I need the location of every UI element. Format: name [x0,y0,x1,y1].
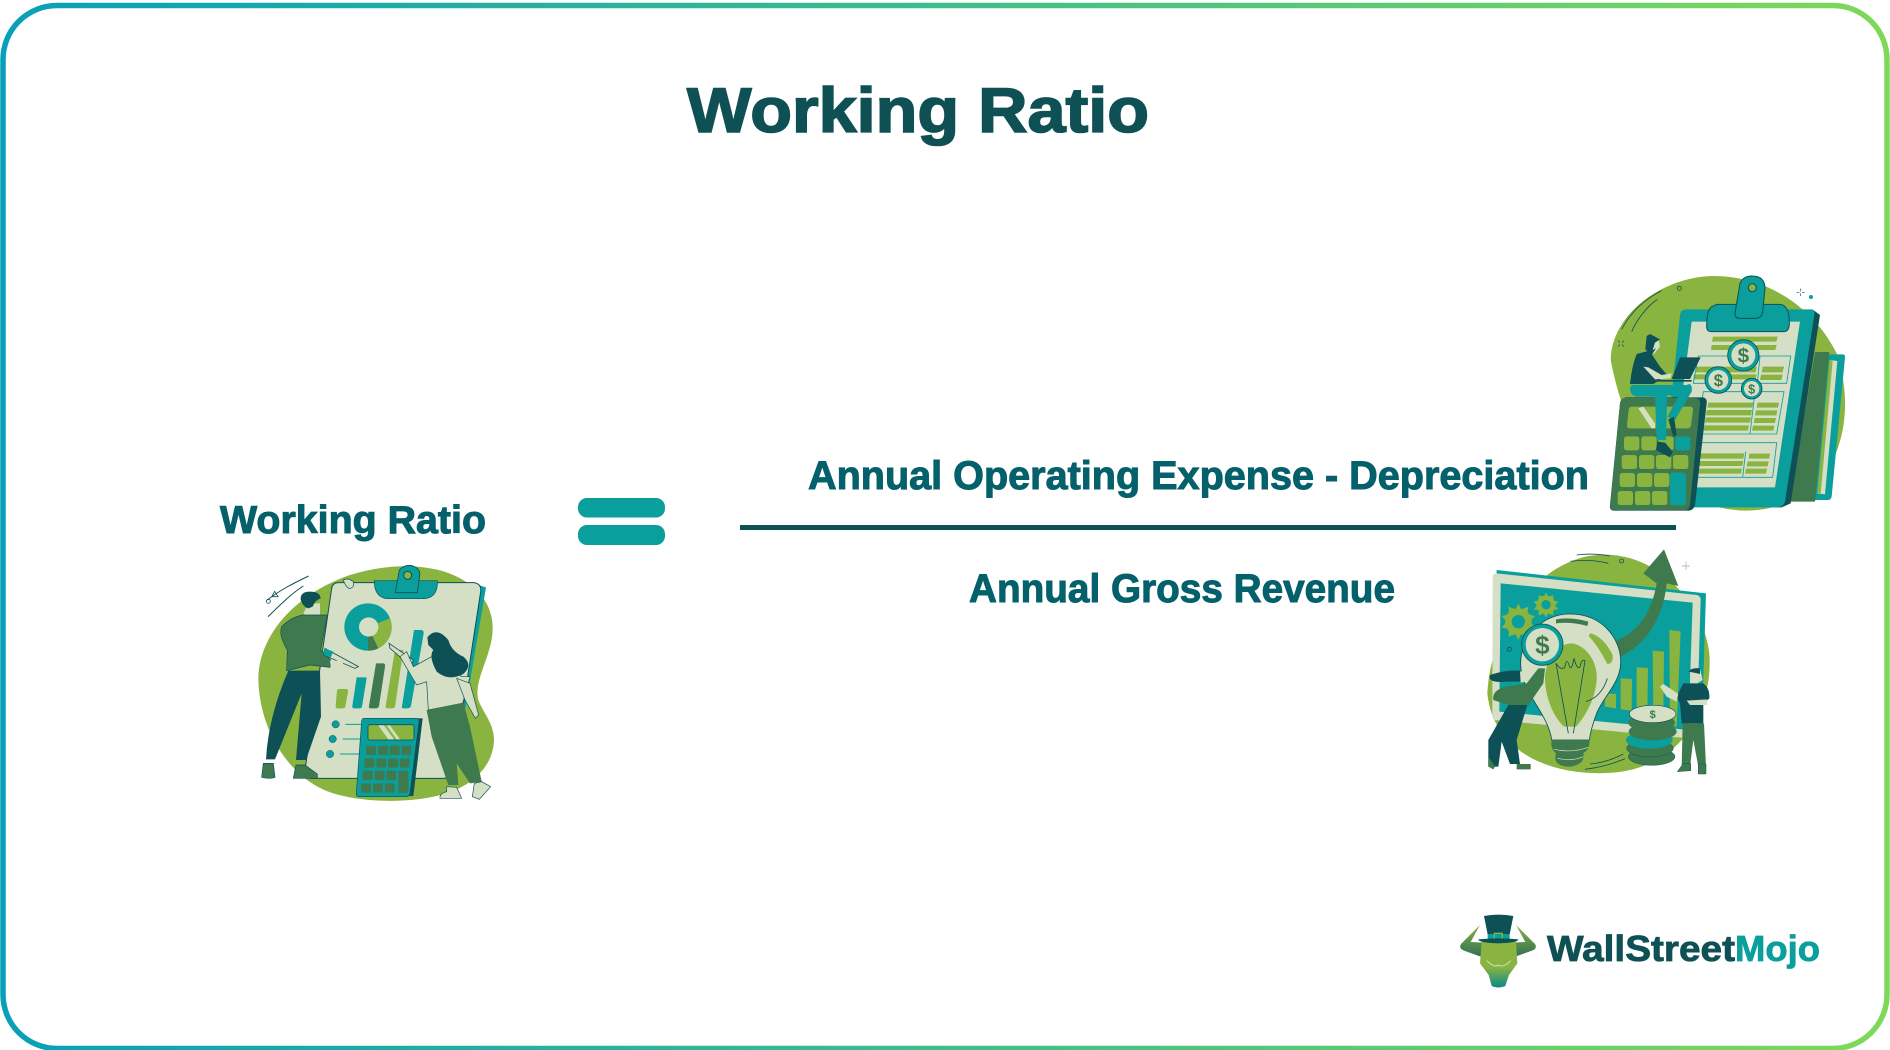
icon: clipboard, calculator and person with laptop: $ [1714,371,1724,390]
icon: light bulb, monitor chart and growth arrow: $ [1650,709,1657,721]
title: Working Ratio [687,76,1149,146]
logo wordmark teal: Mojo [1735,928,1820,969]
WallStreetMojo logo [1460,915,1820,988]
logo mark: bull with top hat [1460,915,1536,988]
icon: light bulb, monitor chart and growth arrow [1487,549,1710,774]
fraction bar [740,525,1676,530]
formula numerator: Annual Operating Expense - Depreciation [808,454,1589,498]
logo wordmark dark: WallStreet [1547,928,1735,969]
icon: light bulb, monitor chart and growth arrow: $ [1535,630,1550,660]
formula left term: Working Ratio: Working Ratio [220,499,486,542]
icon: clipboard, calculator and person with laptop [1610,276,1845,511]
icon: clipboard, calculator and person with laptop: $ [1748,382,1755,396]
formula denominator: Annual Gross Revenue [969,567,1395,611]
icon: two people with clipboard chart [258,565,494,801]
icon: clipboard, calculator and person with laptop: $ [1738,345,1750,368]
equals sign [578,498,665,545]
